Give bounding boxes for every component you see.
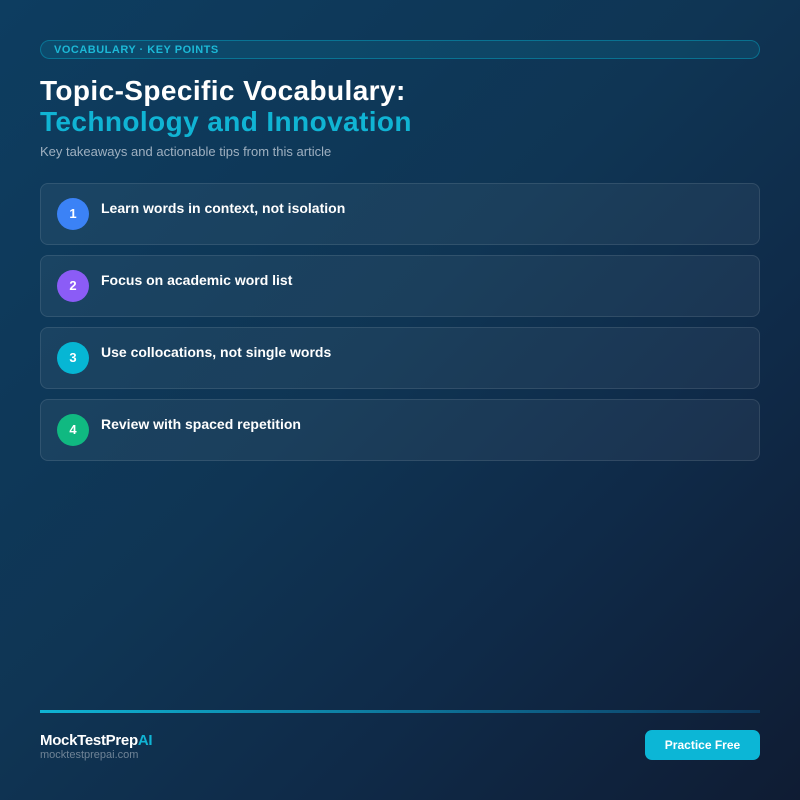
card text 1: Learn words in context, not isolation bbox=[101, 200, 345, 216]
badge 3 bbox=[57, 342, 89, 374]
title line 2: Technology and Innovation bbox=[40, 106, 412, 137]
tag pill: VOCABULARY · KEY POINTS bbox=[54, 44, 219, 56]
badge 4 bbox=[57, 414, 89, 446]
subtitle: Key takeaways and actionable tips from this article bbox=[40, 144, 331, 159]
card text 4: Review with spaced repetition bbox=[101, 416, 301, 432]
card 1 bbox=[40, 183, 760, 245]
badge 4: 4 bbox=[69, 422, 77, 437]
title line 1: Topic-Specific Vocabulary: bbox=[40, 75, 406, 106]
card text 3: Use collocations, not single words bbox=[101, 344, 331, 360]
card text 2: Focus on academic word list bbox=[101, 272, 292, 288]
CTA button bbox=[645, 730, 760, 760]
tag pill bbox=[40, 40, 760, 59]
badge 2 bbox=[57, 270, 89, 302]
card 3 bbox=[40, 327, 760, 389]
card 4 bbox=[40, 399, 760, 461]
CTA button: Practice Free bbox=[665, 738, 740, 752]
badge 2: 2 bbox=[69, 278, 77, 293]
badge 1 bbox=[57, 198, 89, 230]
card 2 bbox=[40, 255, 760, 317]
badge 1: 1 bbox=[69, 206, 77, 221]
brand name: MockTestPrepAI bbox=[40, 732, 152, 749]
badge 3: 3 bbox=[69, 350, 77, 365]
footer accent line bbox=[40, 710, 760, 713]
brand url: mocktestprepai.com bbox=[40, 749, 138, 761]
